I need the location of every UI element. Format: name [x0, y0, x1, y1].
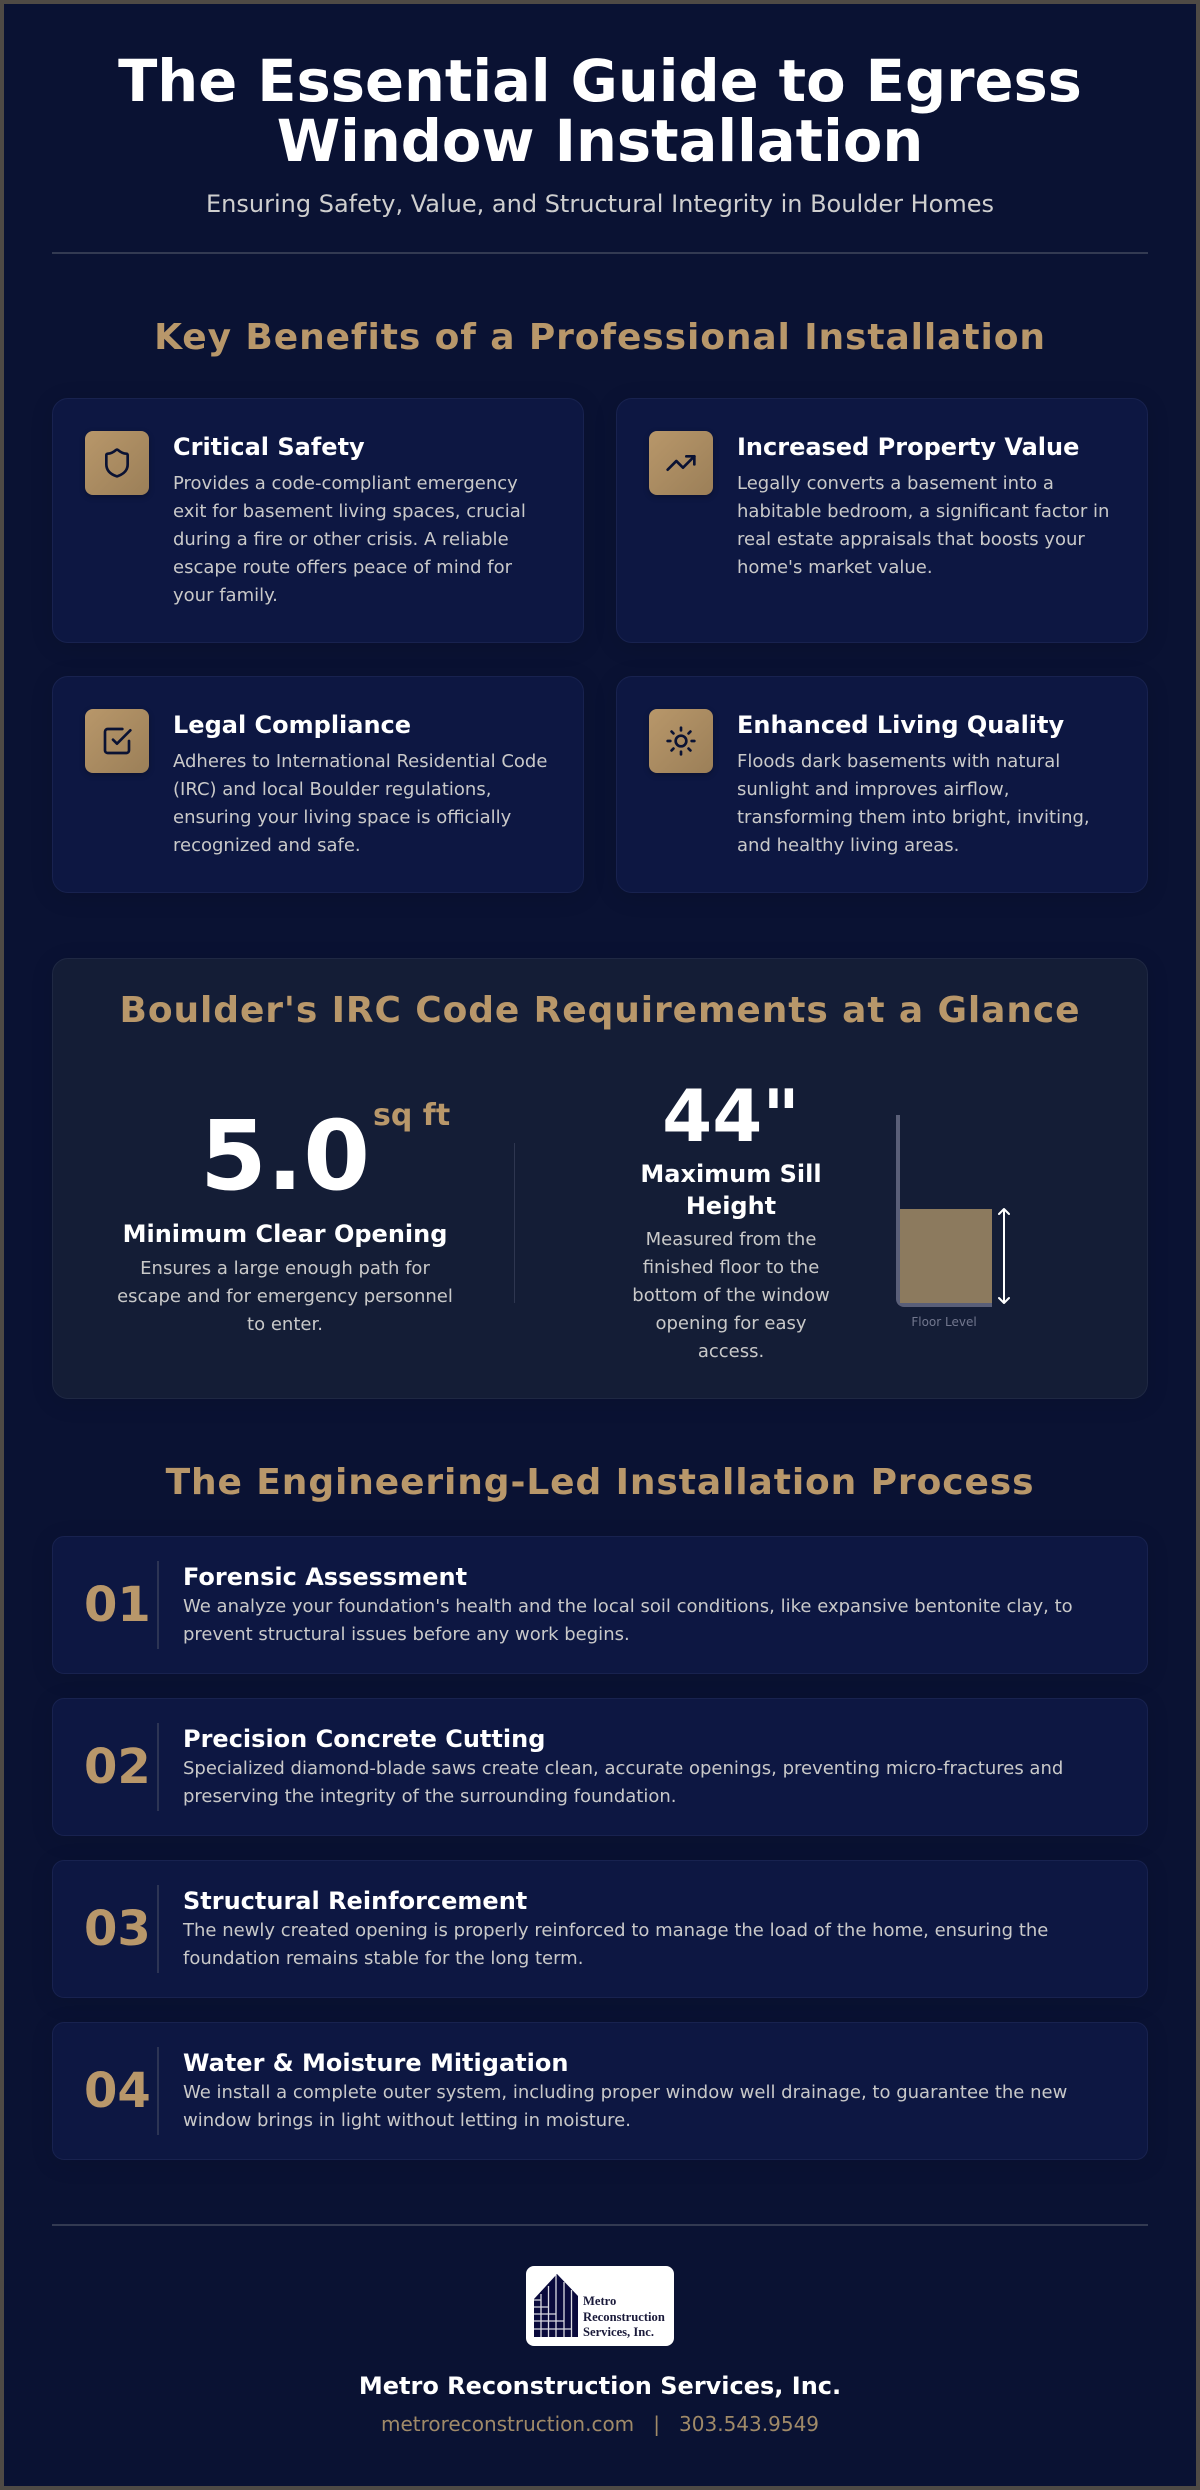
card text: habitable bedroom, a significant factor in	[737, 501, 1109, 522]
card text: ensuring your living space is officially	[173, 807, 511, 828]
step 04	[52, 2022, 1148, 2160]
card text	[173, 751, 547, 856]
step number: 04	[84, 2063, 151, 2119]
step number: 01	[84, 1577, 151, 1633]
step text	[183, 1596, 1073, 1645]
step text: window brings in light without letting in moisture.	[183, 2110, 631, 2131]
step text: Specialized diamond-blade saws create clean, accurate openings, preventing micro-fractures and	[183, 1758, 1063, 1779]
stat text: access.	[698, 1341, 764, 1362]
card text	[173, 473, 526, 606]
stat: 44 inches: 44"	[662, 1074, 800, 1158]
stat: 5.0 sq ft	[200, 1098, 450, 1212]
logo mark: building	[534, 2274, 578, 2337]
card title: Increased Property Value	[737, 433, 1079, 461]
card text: real estate appraisals that boosts your	[737, 529, 1085, 550]
unit sq ft: sq ft	[373, 1098, 450, 1133]
window sill fill	[900, 1209, 992, 1303]
card text: sunlight and improves airflow,	[737, 779, 1009, 800]
stat text: bottom of the window	[632, 1285, 830, 1306]
panel: IRC code requirements	[52, 958, 1148, 1399]
step number: 02	[84, 1739, 151, 1795]
panel: critical safety card	[52, 398, 584, 643]
card text: and healthy living areas.	[737, 835, 959, 856]
diagram: sill height	[896, 1115, 1010, 1329]
wall and floor lines	[896, 1115, 992, 1307]
step text: preserving the integrity of the surrounding foundation.	[183, 1786, 676, 1807]
card text: Adheres to International Residential Code	[173, 751, 547, 772]
card text	[737, 751, 1090, 856]
value 5.0: 5.0	[200, 1100, 370, 1212]
subtitle: Ensuring Safety, Value, and Structural Integrity in Boulder Homes	[206, 190, 994, 218]
stat text: Measured from the	[646, 1229, 816, 1250]
step text: prevent structural issues before any work begins.	[183, 1624, 630, 1645]
panel: legal compliance card	[52, 676, 584, 893]
card text: escape route offers peace of mind for	[173, 557, 512, 578]
card text: home's market value.	[737, 557, 933, 578]
label: floor level: Floor Level	[911, 1315, 977, 1329]
card text: Provides a code-compliant emergency	[173, 473, 518, 494]
heading: installation process: The Engineering-Led Installation Process	[166, 1462, 1034, 1503]
logo wordmark	[583, 2294, 665, 2339]
card title: Enhanced Living Quality	[737, 711, 1064, 739]
stat text: opening for easy	[655, 1313, 807, 1334]
stat label: maximum sill height: Maximum Sill	[640, 1160, 822, 1188]
stat text	[117, 1258, 453, 1335]
heading: code requirements: Boulder's IRC Code Requirements at a Glance	[120, 990, 1080, 1031]
logo wordmark: Metro	[583, 2294, 616, 2308]
icon: trending up	[649, 431, 713, 495]
card text: Legally converts a basement into a	[737, 473, 1054, 494]
stat text: escape and for emergency personnel	[117, 1286, 453, 1307]
step text: We analyze your foundation's health and the local soil conditions, like expansive bentonite clay, to	[183, 1596, 1073, 1617]
title: Window Installation	[277, 108, 923, 175]
icon: check square	[85, 709, 149, 773]
company name: Metro Reconstruction Services, Inc.	[359, 2372, 841, 2400]
step 02	[52, 1698, 1148, 1836]
card text: recognized and safe.	[173, 835, 361, 856]
card title: Critical Safety	[173, 433, 365, 461]
step text: foundation remains stable for the long term.	[183, 1948, 583, 1969]
contact details: metroreconstruction.com | 303.543.9549	[381, 2412, 819, 2436]
stat text: Ensures a large enough path for	[140, 1258, 430, 1279]
stat text: to enter.	[247, 1314, 323, 1335]
card text	[737, 473, 1109, 578]
stat label: maximum sill height	[640, 1160, 822, 1220]
step text: We install a complete outer system, including proper window well drainage, to guarantee the new	[183, 2082, 1067, 2103]
step title: Structural Reinforcement	[183, 1887, 527, 1915]
logo	[526, 2266, 674, 2346]
card text: your family.	[173, 585, 278, 606]
card text: exit for basement living spaces, crucial	[173, 501, 526, 522]
heading: key benefits: Key Benefits of a Professional Installation	[154, 317, 1046, 358]
stat label: maximum sill height: Height	[686, 1192, 776, 1220]
step title: Precision Concrete Cutting	[183, 1725, 545, 1753]
card text: during a fire or other crisis. A reliable	[173, 529, 509, 550]
step text	[183, 1758, 1063, 1807]
logo wordmark: Reconstruction	[583, 2310, 665, 2324]
card text: (IRC) and local Boulder regulations,	[173, 779, 491, 800]
icon: shield	[85, 431, 149, 495]
step text	[183, 2082, 1067, 2131]
stat text	[632, 1229, 830, 1362]
step text	[182, 1920, 1048, 1969]
icon: sun	[649, 709, 713, 773]
stat text: finished floor to the	[643, 1257, 819, 1278]
card title: Legal Compliance	[173, 711, 411, 739]
card text: transforming them into bright, inviting,	[737, 807, 1090, 828]
step title: Water & Moisture Mitigation	[183, 2049, 568, 2077]
card text: Floods dark basements with natural	[737, 751, 1060, 772]
logo wordmark: Services, Inc.	[583, 2325, 654, 2339]
title: The Essential Guide to Egress	[118, 48, 1082, 115]
stat label: minimum clear opening: Minimum Clear Opening	[123, 1220, 447, 1248]
step 03	[52, 1860, 1148, 1998]
arrow: sill height	[998, 1208, 1010, 1304]
title	[118, 48, 1082, 175]
step title: Forensic Assessment	[183, 1563, 467, 1591]
panel: increased property value card	[616, 398, 1148, 643]
step number: 03	[84, 1901, 151, 1957]
step 01	[52, 1536, 1148, 1674]
step text: The newly created opening is properly reinforced to manage the load of the home, ensuring the	[183, 1920, 1048, 1941]
panel: enhanced living quality card	[616, 676, 1148, 893]
